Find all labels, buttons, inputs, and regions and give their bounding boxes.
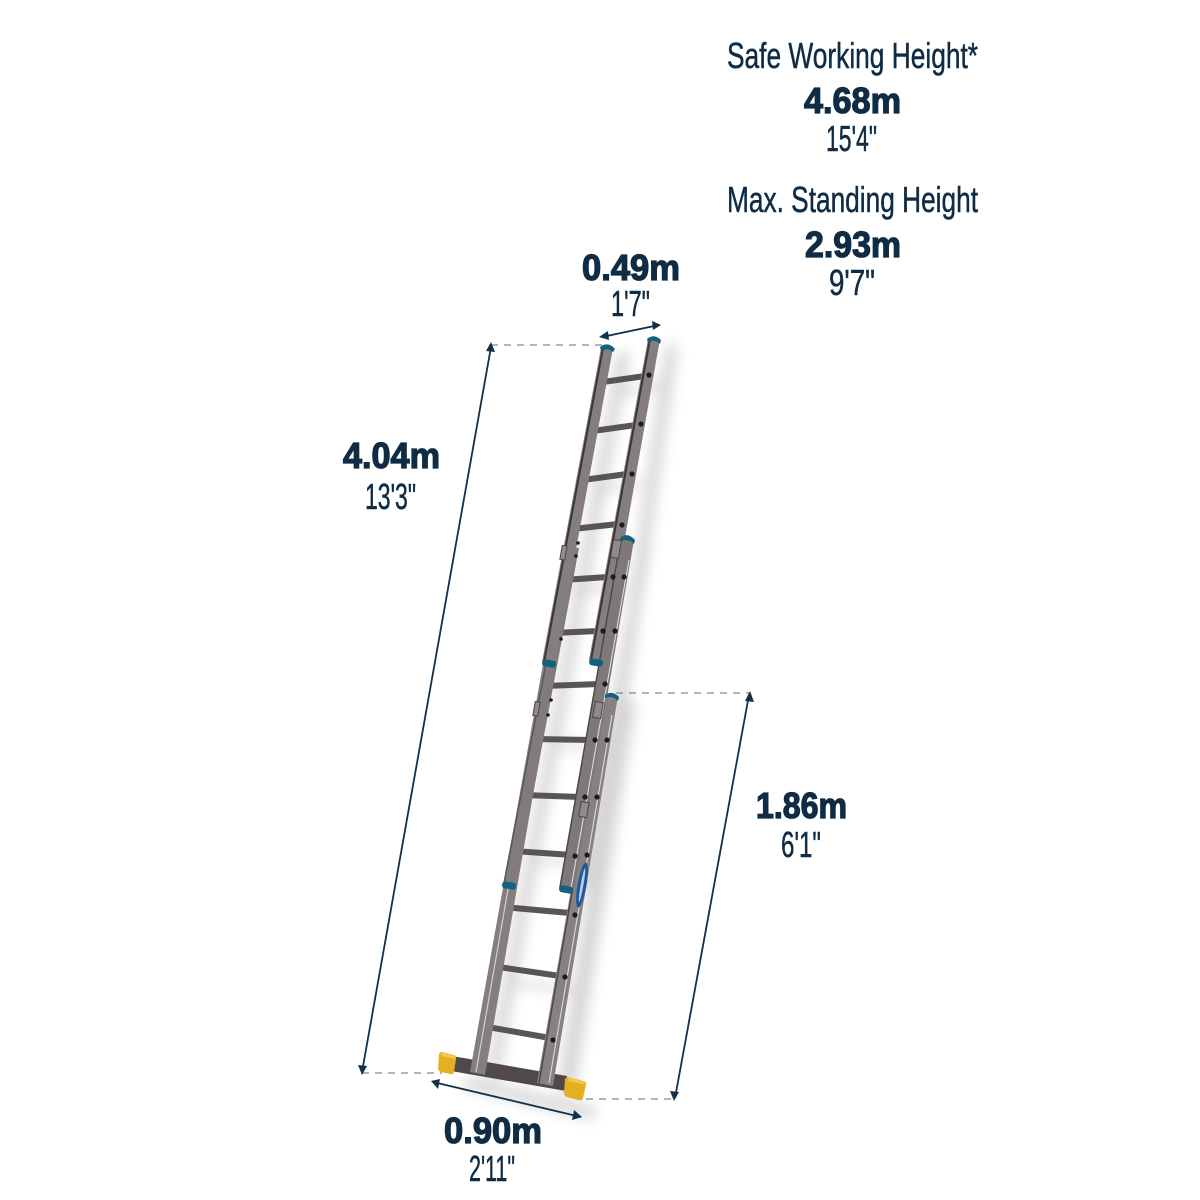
blue rail end caps [502, 336, 661, 894]
dimension: closed length 1.86m [586, 691, 847, 1101]
ladder rungs [482, 376, 645, 1038]
ladder [438, 336, 661, 1100]
heading: max standing height [727, 179, 978, 303]
top section left rail [542, 348, 613, 664]
bottom section left rail [470, 664, 555, 1075]
heading: safe working height: 15'4" [826, 118, 877, 159]
middle section left rail [503, 548, 579, 886]
dimension: top width 0.49m: 0.49m [582, 247, 680, 288]
heading: safe working height: Safe Working Height* [727, 35, 978, 76]
heading: max standing height: Max. Standing Height [727, 179, 978, 220]
dimension: closed length 1.86m: 6'1" [781, 824, 821, 865]
rail brackets [533, 539, 622, 818]
right yellow foot [564, 1077, 586, 1100]
left yellow foot [438, 1052, 456, 1074]
base stabiliser bar [451, 1056, 567, 1091]
heading: max standing height: 2.93m [805, 224, 901, 265]
bottom section right rail [537, 696, 618, 1086]
ladder shadow [465, 345, 672, 1114]
top section right rail [589, 339, 660, 662]
dimension: base width 0.90m [431, 1079, 582, 1189]
dimension: overall length 4.04m [343, 342, 602, 1075]
heading: safe working height: 4.68m [804, 80, 901, 121]
heading: max standing height: 9'7" [829, 262, 875, 303]
dimension: base width 0.90m: 2'11" [469, 1148, 515, 1189]
dimension: top width 0.49m: 1'7" [611, 283, 650, 324]
dimension: closed length 1.86m: 1.86m [756, 785, 847, 826]
blue brand label [574, 862, 590, 908]
dimension: base width 0.90m: 0.90m [444, 1110, 542, 1151]
middle section right rail [559, 538, 634, 890]
dimension: overall length 4.04m: 4.04m [343, 435, 440, 476]
heading: safe working height [727, 35, 978, 159]
dimension: overall length 4.04m: 13'3" [365, 476, 416, 517]
rung bolts [546, 372, 652, 1043]
dimension: top width 0.49m [582, 247, 680, 340]
